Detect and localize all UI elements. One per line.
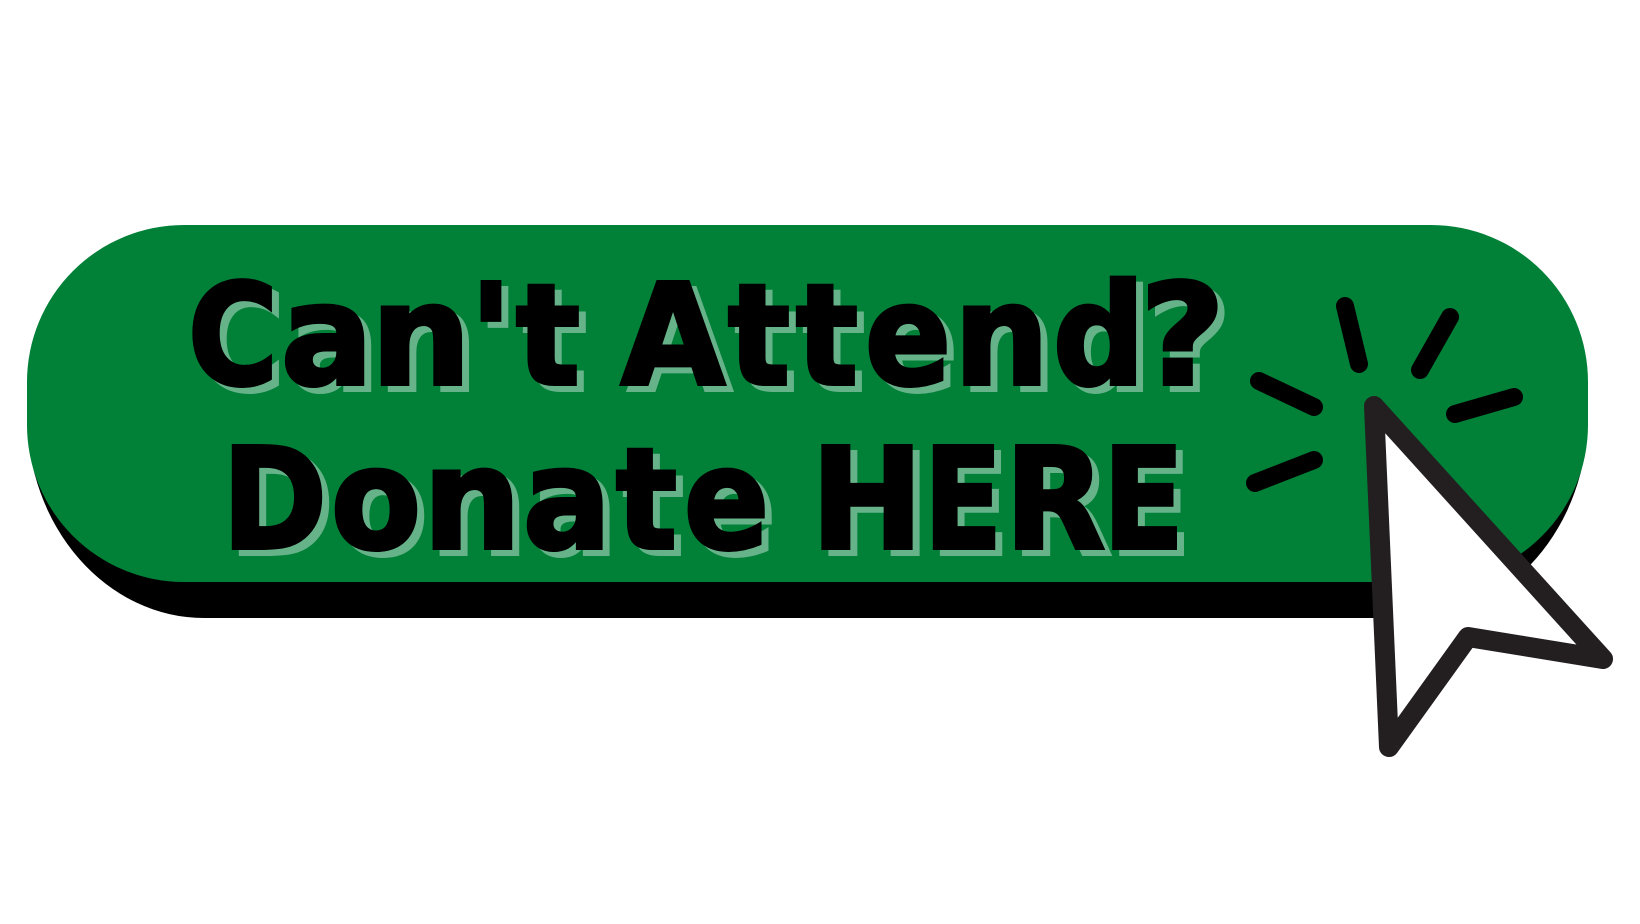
heading shadow: Can't Attend? Donate HERE: t	[803, 261, 865, 424]
heading: Can't Attend? Donate HERE: D	[222, 419, 327, 582]
heading: Can't Attend? Donate HERE: t	[616, 419, 677, 582]
heading shadow: Can't Attend? Donate HERE: n	[961, 261, 1056, 424]
green button body	[27, 225, 1588, 582]
heading: Can't Attend? Donate HERE: t	[728, 255, 790, 418]
heading: Can't Attend? Donate HERE: e	[865, 255, 951, 418]
icon: mouse cursor	[1374, 406, 1603, 747]
heading: Can't Attend? Donate HERE: R	[1005, 419, 1105, 582]
heading shadow: Can't Attend? Donate HERE: t	[735, 261, 797, 424]
heading shadow: Can't Attend? Donate HERE: ?	[1147, 261, 1232, 424]
heading: Can't Attend? Donate HERE: o	[331, 419, 421, 582]
heading shadow: Can't Attend? Donate HERE: A	[628, 261, 732, 424]
heading: Can't Attend? Donate HERE: a	[281, 255, 373, 418]
button shadow	[27, 415, 1588, 618]
heading: Can't Attend? Donate HERE: C	[188, 255, 278, 418]
heading: Can't Attend? Donate HERE: n	[371, 255, 471, 418]
heading: Can't Attend? Donate HERE: ?	[1140, 255, 1225, 418]
heading: Can't Attend? Donate HERE: t	[516, 255, 580, 418]
icon: click sparks	[1255, 306, 1514, 483]
heading shadow: Can't Attend? Donate HERE: t	[623, 425, 684, 588]
heading: Can't Attend? Donate HERE: n	[423, 419, 521, 582]
heading shadow: Can't Attend? Donate HERE: H	[818, 425, 930, 588]
heading: Can't Attend? Donate HERE: a	[523, 419, 611, 582]
heading shadow: Can't Attend? Donate HERE: n	[430, 425, 528, 588]
heading: Can't Attend? Donate HERE: '	[469, 255, 513, 418]
heading: Can't Attend? Donate HERE: E	[924, 419, 1002, 582]
heading: Can't Attend? Donate HERE: t	[796, 255, 858, 418]
heading shadow: Can't Attend? Donate HERE: n	[378, 261, 478, 424]
heading: Can't Attend? Donate HERE: d	[1053, 255, 1145, 418]
heading: Can't Attend? Donate HERE: A	[621, 255, 725, 418]
heading shadow: Can't Attend? Donate HERE	[195, 261, 1232, 588]
heading shadow: Can't Attend? Donate HERE: e	[691, 425, 776, 588]
heading shadow: Can't Attend? Donate HERE: E	[1110, 425, 1191, 588]
heading shadow: Can't Attend? Donate HERE: e	[872, 261, 958, 424]
heading shadow: Can't Attend? Donate HERE: a	[288, 261, 380, 424]
heading: Can't Attend? Donate HERE: H	[811, 419, 923, 582]
heading shadow: Can't Attend? Donate HERE: D	[229, 425, 334, 588]
heading shadow: Can't Attend? Donate HERE: C	[195, 261, 285, 424]
heading shadow: Can't Attend? Donate HERE: o	[338, 425, 428, 588]
heading shadow: Can't Attend? Donate HERE: a	[530, 425, 618, 588]
heading shadow: Can't Attend? Donate HERE: E	[931, 425, 1009, 588]
heading: Can't Attend? Donate HERE	[188, 255, 1225, 582]
heading: Can't Attend? Donate HERE: n	[954, 255, 1049, 418]
heading shadow: Can't Attend? Donate HERE: '	[476, 261, 520, 424]
heading: Can't Attend? Donate HERE: e	[684, 419, 769, 582]
heading shadow: Can't Attend? Donate HERE: d	[1060, 261, 1152, 424]
heading shadow: Can't Attend? Donate HERE: t	[523, 261, 587, 424]
heading: Can't Attend? Donate HERE: E	[1103, 419, 1184, 582]
heading shadow: Can't Attend? Donate HERE: R	[1012, 425, 1112, 588]
